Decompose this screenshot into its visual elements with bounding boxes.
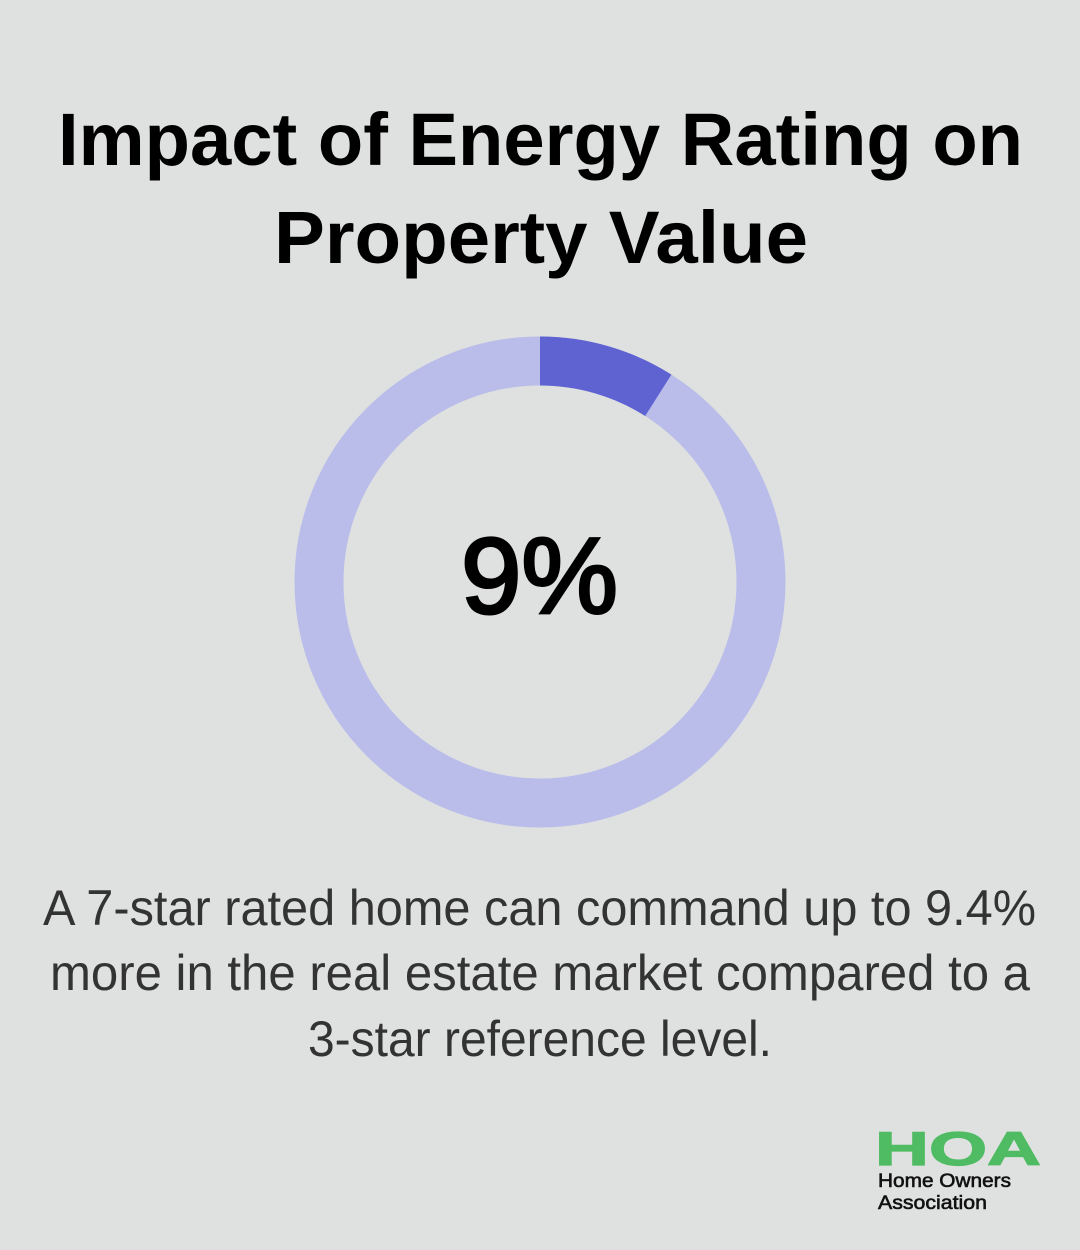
description text: A 7-star rated home can command up to 9.4% bbox=[43, 880, 1036, 936]
description text bbox=[43, 880, 1036, 1067]
logo wordmark bbox=[878, 1170, 1011, 1214]
donut centre value: 9% bbox=[461, 515, 618, 636]
donut track bbox=[319, 361, 761, 803]
logo wordmark: Home Owners bbox=[878, 1170, 1011, 1192]
description text: 3-star reference level. bbox=[308, 1011, 772, 1067]
donut chart: 9% bbox=[319, 361, 761, 803]
donut highlighted segment bbox=[540, 361, 658, 395]
title: Property Value bbox=[274, 196, 808, 279]
title: Impact of Energy Rating on bbox=[58, 98, 1023, 181]
description text: more in the real estate market compared to a bbox=[50, 945, 1030, 1001]
logo: Home Owners Association bbox=[875, 1122, 1041, 1214]
title bbox=[58, 98, 1023, 279]
logo mark HOA: HOA bbox=[875, 1122, 1041, 1175]
logo wordmark: Association bbox=[878, 1192, 987, 1214]
